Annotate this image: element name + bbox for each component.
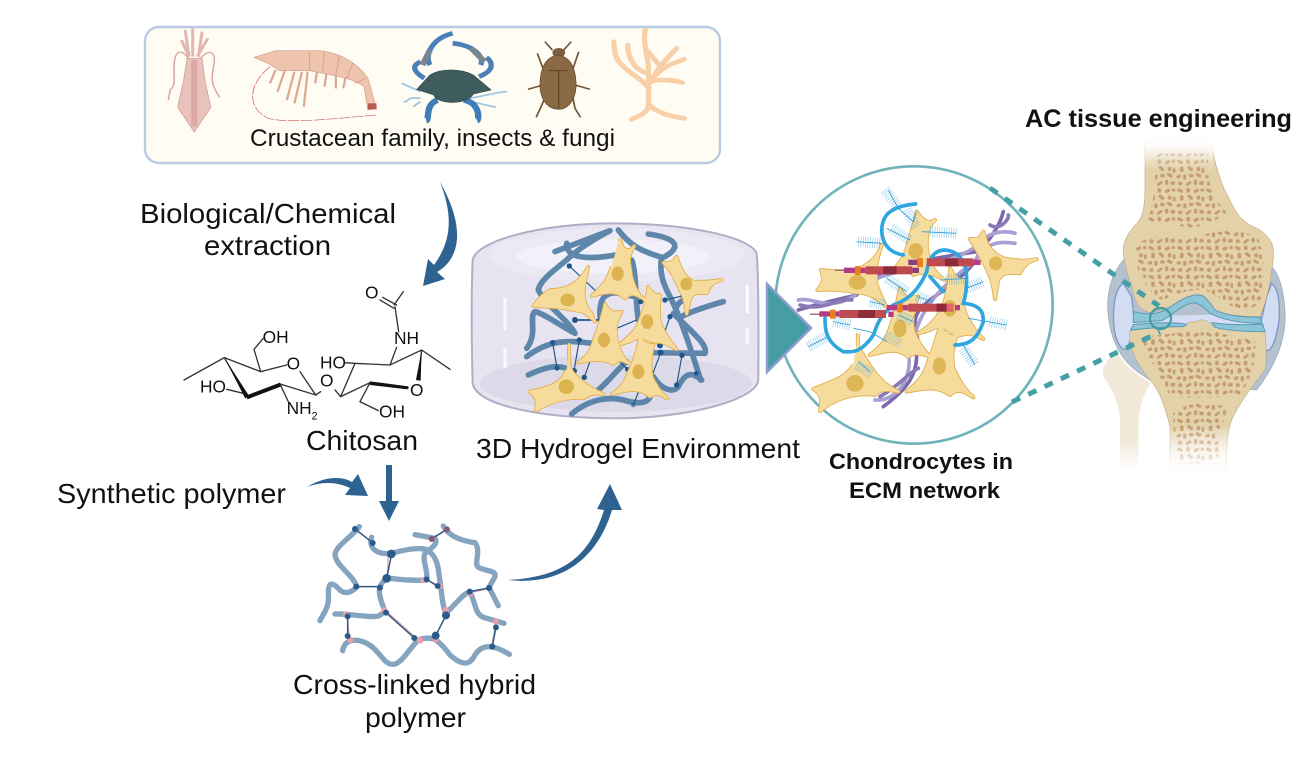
- purple fibrils: [798, 212, 1015, 407]
- focus circle: [1150, 308, 1171, 329]
- chitosan molecule: NH: [287, 398, 312, 418]
- dotted zoom lines: [990, 188, 1160, 402]
- label: extraction: extraction: [204, 230, 331, 261]
- blue strands: [825, 204, 983, 352]
- chitosan molecule: HO: [320, 353, 346, 373]
- chitosan molecule: O: [287, 353, 300, 373]
- label: Chitosan: Chitosan: [306, 425, 418, 456]
- label: extraction: Biological/Chemical: [140, 198, 396, 229]
- label: chondrocytes: [829, 449, 1013, 503]
- title: AC tissue engineering: [1025, 105, 1292, 133]
- label: hydrogel: 3D Hydrogel Environment: [476, 433, 800, 464]
- cartilage: [1133, 295, 1262, 323]
- label: cross-linked polymer: polymer: [365, 702, 466, 733]
- icon: squid: [168, 28, 220, 132]
- hydrogel cylinder: [472, 223, 758, 418]
- arrow: extraction: [423, 182, 457, 286]
- femur: [1123, 140, 1273, 317]
- capsule: [1108, 260, 1285, 390]
- arrow: synthetic polymer: [307, 474, 368, 496]
- chitosan molecule: OH: [263, 327, 289, 347]
- label: synthetic polymer: Synthetic polymer: [57, 478, 286, 509]
- chitosan molecule: 2: [312, 410, 318, 422]
- tibia: [1130, 320, 1266, 470]
- arrow: down to polymer: [379, 465, 399, 521]
- chitosan molecule: NH: [394, 328, 419, 348]
- feathery proteoglycans: [808, 190, 1007, 373]
- chitosan molecule: HO: [200, 377, 226, 397]
- icon: beetle: [528, 42, 590, 117]
- chitosan molecule: [184, 282, 450, 422]
- caption: Crustacean family, insects & fungi: [250, 125, 615, 152]
- label: chondrocytes: Chondrocytes in: [829, 449, 1013, 474]
- icon: crab: [402, 33, 507, 121]
- arrow: hydrogel to ECM: [767, 284, 811, 372]
- knee joint: [1103, 137, 1285, 475]
- chitosan molecule: O: [320, 370, 333, 390]
- collagen rods: [810, 258, 981, 319]
- arrow: to hydrogel: [508, 484, 622, 581]
- fibula: [1103, 353, 1151, 470]
- chitosan molecule: O: [365, 282, 378, 302]
- label: chondrocytes: ECM network: [849, 478, 1001, 503]
- icon: shrimp: [253, 51, 377, 121]
- label: cross-linked polymer: [293, 669, 536, 733]
- chitosan molecule: OH: [379, 401, 405, 421]
- cross-linked polymer network: [320, 526, 509, 664]
- ECM circle: [775, 166, 1053, 444]
- label: extraction: [140, 198, 396, 261]
- label: cross-linked polymer: Cross-linked hybrid: [293, 669, 536, 700]
- panel: chitin sources: [145, 27, 720, 163]
- chitosan molecule: O: [410, 380, 423, 400]
- icon: fungi: [614, 30, 684, 119]
